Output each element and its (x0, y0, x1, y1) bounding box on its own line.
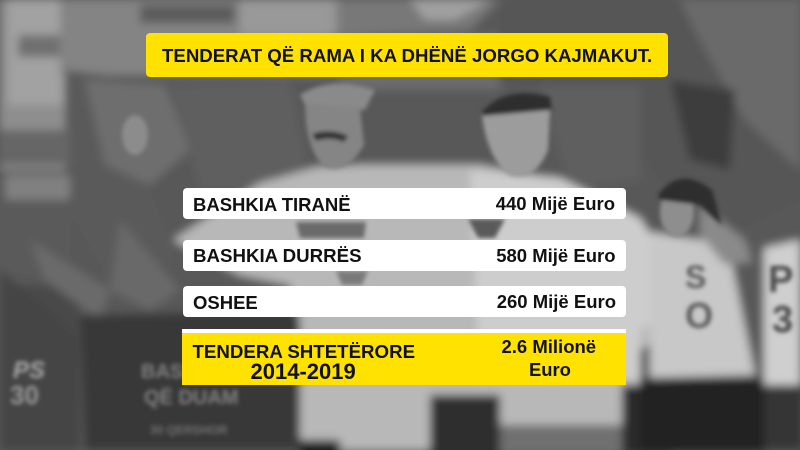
background photo: blurred greyscale rally crowd: 30 QERSHOR (150, 423, 228, 437)
label: BASHKIA DURRËS (193, 245, 362, 266)
row: OSHEE (182, 286, 626, 317)
amount: 440 Mijë Euro (496, 193, 615, 214)
background photo: blurred greyscale rally crowd: PS (13, 357, 45, 384)
background photo: blurred greyscale rally crowd: 3 (772, 299, 793, 341)
title text: TENDERAT QË RAMA I KA DHËNË JORGO KAJMAKUT. (162, 45, 652, 66)
amount: 260 Mijë Euro (497, 291, 616, 312)
man on right (482, 93, 552, 118)
shirt prints: S (685, 259, 706, 295)
amount unit: Euro (529, 359, 571, 380)
amount: 580 Mijë Euro (496, 244, 616, 266)
label: OSHEE (193, 292, 258, 313)
years: 2014-2019 (250, 359, 356, 384)
background photo: blurred greyscale rally crowd: BAS (141, 361, 183, 383)
man in cap (300, 84, 375, 110)
label: TENDERA SHTETËRORE (192, 340, 415, 362)
title banner (146, 33, 668, 77)
background photo: blurred greyscale rally crowd: 30 (10, 380, 39, 410)
background photo: blurred greyscale rally crowd: P (768, 259, 793, 301)
hand (122, 115, 148, 155)
shirt print patches (296, 222, 366, 238)
background photo: blurred greyscale rally crowd: QË DUAM (144, 386, 238, 409)
amount: 2.6 Milionë (502, 336, 596, 357)
row: Bashkia Durrës (182, 240, 626, 271)
row: Tendera Shtetërore highlighted (182, 329, 626, 385)
row: Bashkia Tiranë (182, 188, 626, 219)
background photo: blurred greyscale rally crowd: O (685, 295, 713, 336)
child (660, 187, 694, 237)
label: BASHKIA TIRANË (193, 194, 351, 214)
